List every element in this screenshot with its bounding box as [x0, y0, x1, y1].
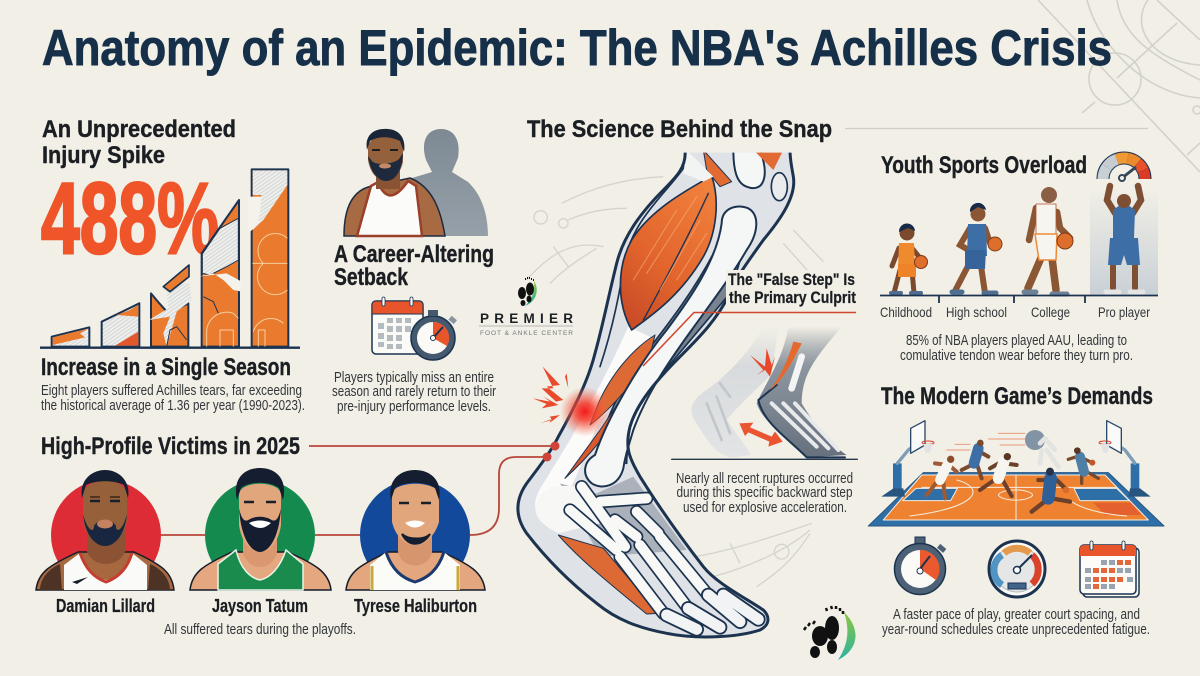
illustration: basketball court	[868, 421, 1164, 526]
foot bones	[570, 487, 758, 629]
court floor	[868, 473, 1164, 526]
lower muscle strip	[564, 405, 616, 479]
callout heading line 2: the Primary Culprit	[729, 288, 856, 307]
body text line 2: comulative tendon wear before they turn pro.	[900, 348, 1133, 364]
trailing foot toe detail	[707, 383, 730, 440]
callout heading: The "False Step" Is	[728, 270, 855, 289]
subheading: increase: Increase in a Single Season	[41, 354, 291, 381]
lower soleus muscle	[590, 335, 655, 425]
quad muscles	[703, 150, 732, 187]
heading: victims: High-Profile Victims in 2025	[41, 433, 300, 460]
player: pro	[1106, 186, 1143, 292]
logo mark bottom	[804, 606, 855, 660]
logo wordmark: PREMIER	[480, 311, 573, 326]
double arrow	[739, 423, 783, 447]
label: childhood: Childhood	[880, 304, 932, 320]
caption: playoffs: All suffered tears during the playoffs.	[164, 622, 356, 638]
tendon white area	[535, 327, 657, 520]
tibia	[585, 206, 756, 486]
body text: youth: 85% of NBA players played AAU, leading to	[906, 333, 1127, 349]
label: college: College	[1031, 304, 1070, 320]
heading line 2: Injury Spike	[42, 142, 165, 169]
body text line 2: the historical average of 1.36 per year (1990-2023).	[41, 398, 305, 414]
player: childhood	[891, 223, 928, 293]
icon: calendar and stopwatch	[372, 297, 457, 360]
ground line	[672, 457, 857, 461]
connector to achilles	[160, 446, 552, 535]
left hoop	[881, 421, 934, 497]
heading: science behind the snap: The Science Behind the Snap	[527, 116, 832, 143]
patella	[771, 173, 787, 201]
rupture glow	[560, 387, 610, 437]
heading: career setback: A Career-Altering	[334, 241, 494, 268]
leg outline	[518, 150, 794, 637]
body text: spike: Eight players suffered Achilles tears, far exceeding	[41, 383, 302, 399]
plantar muscle	[558, 535, 658, 614]
pro player backdrop	[1090, 190, 1158, 295]
icon: calendar	[1080, 541, 1139, 597]
portrait: Tyrese Haliburton	[346, 470, 485, 590]
tendon strain	[770, 342, 802, 390]
heading line 2: Setback	[334, 264, 409, 291]
panel: leg anatomy illustration	[518, 150, 794, 637]
bar chart: cracked rising bars	[40, 169, 300, 348]
big number 488%: 488%	[41, 163, 219, 275]
portrait: Jayson Tatum	[190, 468, 331, 590]
court orange	[883, 475, 1148, 520]
players	[927, 440, 1098, 512]
icon: footprints	[518, 278, 537, 306]
logo rule	[479, 325, 573, 327]
connector dots	[542, 442, 560, 462]
body text line 3: used for explosive acceleration.	[683, 500, 847, 516]
inner back contour	[600, 163, 687, 367]
leading foot	[757, 327, 847, 457]
right hoop	[1099, 421, 1151, 497]
illustration: player and shadow	[344, 129, 488, 236]
name: Tyrese Haliburton: Tyrese Haliburton	[354, 596, 477, 616]
court lines	[910, 475, 1127, 520]
logo tagline: FOOT & ANKLE CENTER	[480, 330, 573, 337]
calf split	[643, 193, 708, 320]
illustration: false step feet	[672, 327, 857, 459]
player: high school	[952, 203, 1002, 293]
panel: high-profile victims	[36, 433, 560, 638]
icon: stopwatch	[894, 537, 946, 594]
icon: overload gauge	[1103, 158, 1145, 181]
player: college	[1024, 187, 1073, 294]
heading: youth: Youth Sports Overload	[881, 152, 1087, 179]
court paint areas	[903, 488, 1129, 501]
callout leader line	[643, 312, 856, 366]
body text: modern game: A faster pace of play, greater court spacing, and	[893, 607, 1140, 623]
panel: career setback	[332, 129, 496, 415]
icon: speedometer	[989, 541, 1045, 597]
panel: youth sports overload	[880, 152, 1158, 364]
heading rule	[845, 128, 1148, 130]
heading: injury spike: An Unprecedented	[42, 116, 236, 143]
foot dorsal shade	[560, 477, 687, 557]
logo: Premier Foot & Ankle Center	[479, 278, 573, 337]
body text: career: Players typically miss an entire	[334, 370, 494, 386]
calf striations	[633, 197, 707, 290]
portrait: Damian Lillard	[36, 470, 174, 590]
decorative court lines top right	[1038, 0, 1200, 172]
name: Damian Lillard: Damian Lillard	[56, 596, 155, 616]
quad muscle right	[756, 152, 782, 170]
callout mask	[726, 270, 860, 308]
calf muscle	[620, 176, 716, 330]
decorative arcs behind leg	[527, 177, 823, 587]
trailing foot	[691, 327, 778, 457]
body text line 2: season and rarely return to their	[332, 384, 496, 400]
timeline axis	[880, 295, 1158, 303]
femur	[733, 150, 765, 188]
flying ball and motion lines	[947, 430, 1058, 467]
body text line 2: during this specific backward step	[676, 485, 852, 501]
panel: false step	[643, 270, 860, 516]
strain burst	[750, 348, 775, 377]
panel: injury spike	[40, 116, 305, 414]
label: high school: High school	[946, 304, 1007, 320]
body text line 3: pre-injury performance levels.	[337, 399, 491, 415]
upper connective	[683, 150, 713, 182]
bones	[772, 357, 838, 450]
leading foot outline	[758, 385, 845, 457]
lower leg inner shading	[606, 252, 741, 464]
court red corner	[1093, 503, 1142, 515]
leg silhouette	[518, 150, 794, 637]
name: Jayson Tatum: Jayson Tatum	[212, 596, 308, 616]
body text: false step: Nearly all recent ruptures occurred	[676, 471, 853, 487]
heel bone	[535, 486, 600, 533]
pain bursts	[533, 367, 568, 423]
label: pro player: Pro player	[1098, 304, 1150, 320]
panel: modern game's demands	[868, 383, 1164, 638]
